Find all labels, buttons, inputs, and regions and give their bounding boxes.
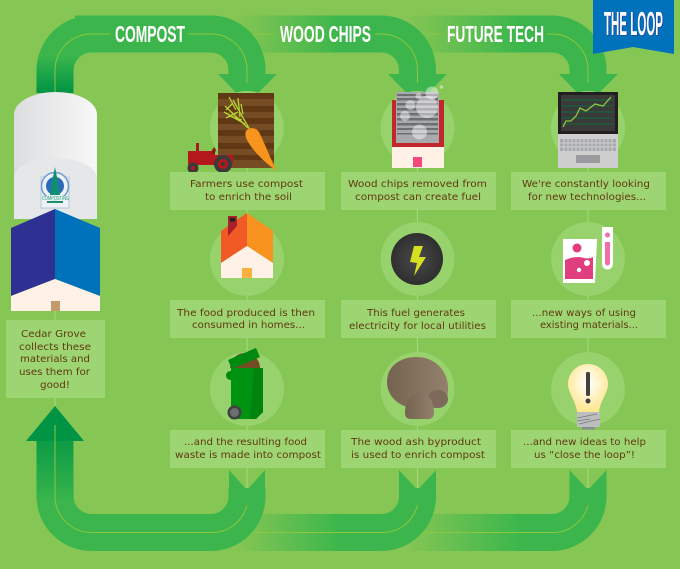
caption: food	[170, 300, 325, 338]
caption: materials: existing materials...	[540, 320, 638, 331]
caption: farmers: to enrich the soil	[205, 192, 292, 203]
caption: electricity: electricity for local utilities	[349, 321, 486, 332]
panel: cedar grove caption: good!	[40, 380, 70, 391]
icon: house	[221, 213, 273, 278]
icon circles	[210, 91, 625, 426]
caption: farmers	[170, 172, 325, 210]
caption: wood chips	[341, 172, 496, 210]
icon: wood chip plant	[392, 85, 444, 168]
caption: wood chips: compost can create fuel	[355, 192, 481, 203]
logo: cedar grove composting	[41, 167, 69, 208]
caption: technologies: We're constantly looking	[522, 179, 650, 190]
arrow: wood chips	[235, 34, 447, 104]
caption: wood chips: Wood chips removed from	[348, 179, 487, 190]
caption: food: The food produced is then	[176, 308, 315, 319]
icon: lightning bolt	[391, 233, 443, 285]
panel: cedar grove caption	[6, 320, 105, 398]
caption: new ideas	[511, 430, 666, 468]
caption: food waste	[170, 430, 325, 468]
caption: food waste: ...and the resulting food	[184, 437, 307, 448]
caption: electricity	[341, 300, 496, 338]
panel: cedar grove caption: Cedar Grove	[21, 329, 86, 340]
caption: food: consumed in homes...	[192, 320, 305, 331]
arrow: bottom return wood chips	[235, 470, 436, 533]
arrow: compost	[55, 34, 277, 104]
caption: technologies: for new technologies...	[528, 192, 646, 203]
caption: materials: ...new ways of using	[532, 308, 636, 319]
caption: food waste: waste is made into compost	[175, 450, 321, 461]
panel: cedar grove caption: collects these	[19, 342, 91, 353]
panels: captions row 2	[170, 300, 666, 338]
icon: laptop with chart	[558, 92, 618, 168]
icon: beaker and test tube	[563, 227, 613, 283]
heading: compost: COMPOST	[115, 21, 185, 47]
logo: cedar grove composting: COMPOSTING	[42, 196, 69, 202]
icon: compost bin	[226, 348, 263, 420]
banner: the loop	[593, 0, 674, 54]
caption: farmers: Farmers use compost	[190, 179, 303, 190]
caption: materials	[511, 300, 666, 338]
panels: captions row 1	[170, 172, 666, 210]
smoke bubbles	[400, 85, 443, 140]
caption: technologies	[511, 172, 666, 210]
heading: wood chips: WOOD CHIPS	[280, 21, 371, 47]
connector lines: column guides	[55, 168, 588, 490]
heading: future tech: FUTURE TECH	[447, 21, 544, 47]
caption: wood ash: is used to enrich compost	[351, 450, 485, 461]
caption: new ideas: ...and new ideas to help	[523, 437, 646, 448]
caption: wood ash: The wood ash byproduct	[350, 437, 481, 448]
tractor	[188, 143, 233, 174]
panel: cedar grove caption: materials and	[20, 354, 90, 365]
icon: light bulb	[568, 364, 608, 430]
caption: new ideas: us “close the loop”!	[534, 450, 635, 461]
caption: wood ash	[341, 430, 496, 468]
panels: captions row 3	[170, 430, 666, 468]
arrow: bottom return compost into cedar grove	[26, 406, 265, 533]
icon: field with carrot and tractor	[188, 93, 277, 174]
carrot greens	[224, 97, 250, 130]
carrot	[245, 128, 277, 171]
caption: electricity: This fuel generates	[366, 308, 465, 319]
panel: cedar grove caption: uses them for	[19, 367, 91, 378]
arrow: future tech	[405, 34, 618, 104]
icon: wood ash mounds	[387, 357, 448, 419]
icon: cedar grove facility	[11, 92, 100, 311]
arrow: bottom return future tech	[405, 470, 606, 533]
